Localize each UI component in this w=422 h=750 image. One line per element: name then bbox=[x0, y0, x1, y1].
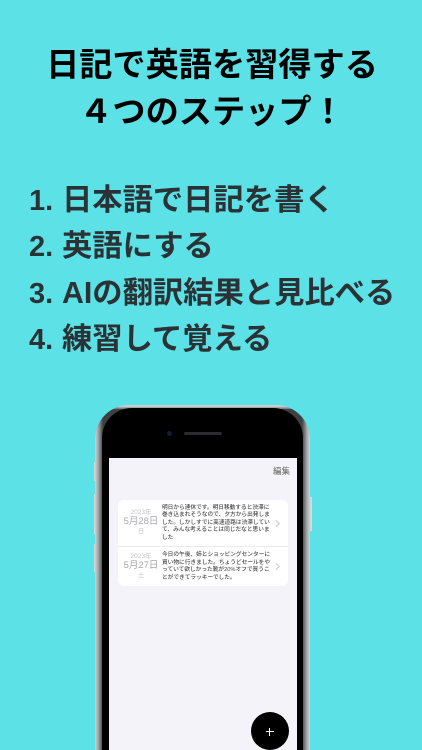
entry 2 text bbox=[162, 550, 270, 580]
entry 2 text: とができてラッキーでした。 bbox=[162, 574, 236, 580]
camera bbox=[167, 431, 172, 436]
entry 1 text: した。しかしすでに高速道路は渋滞してい bbox=[162, 520, 270, 526]
diary card list bbox=[118, 500, 288, 586]
entry 1 text bbox=[162, 504, 270, 540]
divider bbox=[118, 546, 288, 547]
entry 1 text: て、みんな考えることは同じだなと思いま bbox=[162, 527, 270, 533]
title: ４つのステップ！ bbox=[79, 94, 345, 130]
entry 1 text: した bbox=[162, 534, 173, 540]
side buttons bbox=[93, 462, 313, 572]
entry 2 date: 5月27日 bbox=[124, 560, 158, 571]
entry 1 date: 日 bbox=[138, 528, 144, 535]
entry 2 date: 土 bbox=[138, 572, 144, 579]
step 2: 英語にする bbox=[62, 230, 214, 263]
phone mockup bbox=[94, 405, 312, 750]
bezel bbox=[102, 408, 303, 750]
step 3: AIの翻訳結果と見比べる bbox=[62, 277, 395, 310]
step list bbox=[29, 184, 395, 356]
step 4: 練習して覚える bbox=[62, 323, 272, 356]
entry 1 date: 2023年 bbox=[131, 509, 151, 516]
entry 1 text: 明日から連休です。明日移動すると渋滞に bbox=[162, 504, 270, 510]
entry 2 text: 今日の午後、姉とショッピングセンターに bbox=[162, 552, 270, 558]
entry 1 date: 5月28日 bbox=[124, 516, 158, 527]
edit button: 編集 bbox=[273, 466, 290, 476]
entry 2 chevron bbox=[273, 563, 279, 569]
entry 1 date bbox=[124, 508, 158, 535]
phone body bbox=[95, 405, 310, 750]
entry 2 text: っていて欲しかった靴が20%オフで買うこ bbox=[162, 567, 270, 573]
step 1: 1. bbox=[29, 185, 53, 217]
title: 日記で英語を習得する bbox=[46, 46, 378, 84]
entry 1 chevron bbox=[273, 520, 279, 526]
speaker bbox=[184, 432, 222, 435]
step 3: 3. bbox=[29, 278, 53, 310]
step 4: 4. bbox=[29, 324, 53, 356]
entry 1 text: 巻き込まれそうなので、夕方から出発しま bbox=[162, 512, 270, 518]
entry 2 date: 2023年 bbox=[131, 553, 151, 560]
step 1: 日本語で日記を書く bbox=[62, 184, 335, 217]
add button bbox=[251, 712, 289, 750]
entry 2 text: 買い物に行きました。ちょうどセールをや bbox=[162, 560, 270, 566]
app screen bbox=[109, 458, 297, 750]
entry 2 date bbox=[124, 552, 158, 579]
title bbox=[46, 46, 378, 130]
step 2: 2. bbox=[29, 231, 53, 263]
plus icon bbox=[266, 728, 274, 736]
